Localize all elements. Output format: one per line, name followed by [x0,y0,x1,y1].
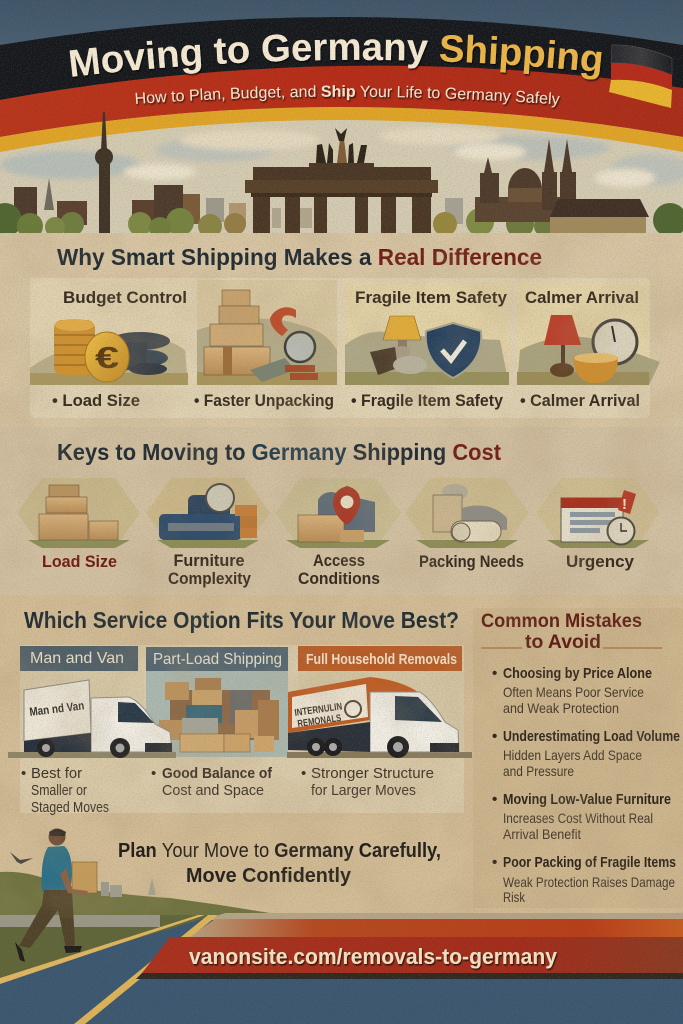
website address: vanonsite.com/removals-to-germany [189,944,558,969]
manor building [550,199,649,233]
closing call to action: Move Confidently [186,865,352,887]
tile: fragile item safety [345,282,509,385]
icon: map pin and boxes [298,486,375,542]
heading: why smart shipping: Why Smart Shipping Makes a Real Difference [57,244,542,270]
tag: part-load shipping [146,647,288,671]
label: budget control: Budget Control [63,288,187,307]
skyline backdrop [0,110,683,233]
factor: furniture complexity [146,478,270,588]
icon: orange removals truck [287,677,472,758]
tile: budget control [30,278,188,385]
distant trees and city [0,872,270,920]
tag: full household removals: Full Household Removals [306,651,457,668]
panel: service options [8,645,472,816]
icon: stacked cargo [159,678,279,752]
bullets: man and van: Staged Moves [31,799,109,816]
yellow band [0,107,683,152]
bullets: full household: • [301,765,306,782]
icon: orange removals truck: INTERNULIN [294,701,343,719]
mistake: poor packing [492,854,676,905]
icon: white van: Man nd Van [29,698,85,719]
mistake: price: Often Means Poor Service [503,684,644,700]
panel: common mistakes [473,608,683,908]
bullets: man and van: Best for [31,765,82,782]
label: calmer arrival: Calmer Arrival [525,288,639,307]
tag: part-load shipping: Part-Load Shipping [153,651,282,668]
mistake: load volume: Hidden Layers Add Space [503,747,642,763]
heading: common mistakes: Common Mistakes [481,611,642,632]
figure: man carrying box [15,828,97,962]
header: sky and German colour bands [0,0,683,233]
panel: benefits [30,278,660,418]
bullets: full household: Stronger Structure [311,765,434,782]
icon: boxes [39,485,118,540]
mistake: low-value furniture: Increases Cost Without Real [503,810,653,826]
label: fragile item safety: Fragile Item Safety [355,288,508,307]
mistake: poor packing: Risk [503,889,526,905]
mistake: price: and Weak Protection [503,700,619,716]
mistake: price [492,665,652,716]
closing call to action [118,840,441,887]
closing call to action: Plan Your Move to Germany Carefully, [118,840,441,862]
label: Urgency [566,552,635,571]
icon: sofa, clock, boxes [159,484,257,540]
factor: access conditions: Conditions [298,569,380,588]
bullets: part-load: Cost and Space [162,782,264,799]
bullets: part-load [151,765,273,799]
red band [0,66,683,137]
mistake: load volume [492,728,680,779]
label: Access [313,551,365,570]
icon: German flag [609,45,672,108]
mistake: low-value furniture: • [492,791,497,808]
grass verge [0,915,215,980]
factor: urgency [536,478,660,571]
icon: calendar, alert and clock: ! [622,496,627,513]
label: Packing Needs [419,552,524,571]
icon: coins and euro [54,319,170,382]
heading: common mistakes: to Avoid [525,632,601,653]
option: part-load shipping [146,647,288,757]
heading: keys to cost: Keys to Moving to Germany Shipping Cost [57,439,501,465]
mistake: low-value furniture: Arrival Benefit [503,826,581,842]
option: full household removals [287,646,472,758]
tag: man and van [20,646,138,671]
bullet: faster unpacking: • Faster Unpacking [194,391,334,410]
label: Furniture [174,551,244,570]
factor: packing needs [405,478,529,571]
tile: faster unpacking [197,280,337,385]
asphalt base [0,918,683,1024]
quadriga statue [316,128,367,163]
heading: service options: Which Service Option Fits Your Move Best? [24,607,459,633]
red banner [136,919,683,979]
bullet: fragile item safety: • Fragile Item Safety [351,391,504,410]
icon: packing rolls [433,484,507,542]
mistake: price: Choosing by Price Alone [503,665,652,682]
tan road shoulder fading under banner [205,913,683,920]
tile: calmer arrival [517,282,660,385]
footer landscape and road [0,872,683,1024]
tag: man and van: Man and Van [30,650,124,667]
title: Moving to Germany Shipping [70,34,602,82]
mistake: load volume: and Pressure [503,763,574,779]
Brandenburg Gate [245,128,438,233]
bullets: man and van: Smaller or [31,782,87,799]
bullets: full household: for Larger Moves [311,782,416,799]
mistake: price: • [492,665,497,682]
factor: load size [17,478,140,571]
icon: TV tower [95,112,113,233]
bullets: part-load: Good Balance of [162,765,273,782]
icon: stacked boxes, clock and bricks [204,290,318,382]
icon: lamp, clock and cup [544,315,637,383]
green tree line [0,203,683,239]
icon: lamp, book and shield [370,316,481,378]
bullets: man and van: • [21,765,26,782]
bullets: man and van [21,765,109,816]
black band [0,17,683,100]
left yellow road line [0,915,205,984]
mistake: load volume: • [492,728,497,745]
cathedral [475,139,576,222]
mistake: poor packing: • [492,854,497,871]
right yellow road line [74,915,218,1024]
factor: access conditions [275,478,401,588]
tag: full household removals [298,646,462,671]
bullets: full household [301,765,434,799]
bullet: calmer arrival: • Calmer Arrival [520,391,640,410]
icon: coins and euro: € [95,340,119,375]
bullet: load size: • Load Size [52,391,140,410]
section band 1 background [0,233,683,427]
section band 2 background [0,427,683,595]
subtitle: How to Plan, Budget, and Ship Your Life to Germany Safely [136,85,562,110]
left city silhouettes [14,178,463,228]
skyline illustration [0,112,683,239]
icon: orange removals truck: REMONALS [297,713,342,730]
mistake: low-value furniture [492,791,671,842]
bullets: part-load: • [151,765,156,782]
icon: bird [10,852,33,864]
factor: furniture complexity: Complexity [168,569,251,588]
panel: cost factors [17,478,660,588]
section band 3 background [0,595,683,920]
label: Load Size [42,552,117,571]
option: man and van [8,646,176,758]
heading: common mistakes [481,611,662,653]
icon: white van [8,680,176,758]
